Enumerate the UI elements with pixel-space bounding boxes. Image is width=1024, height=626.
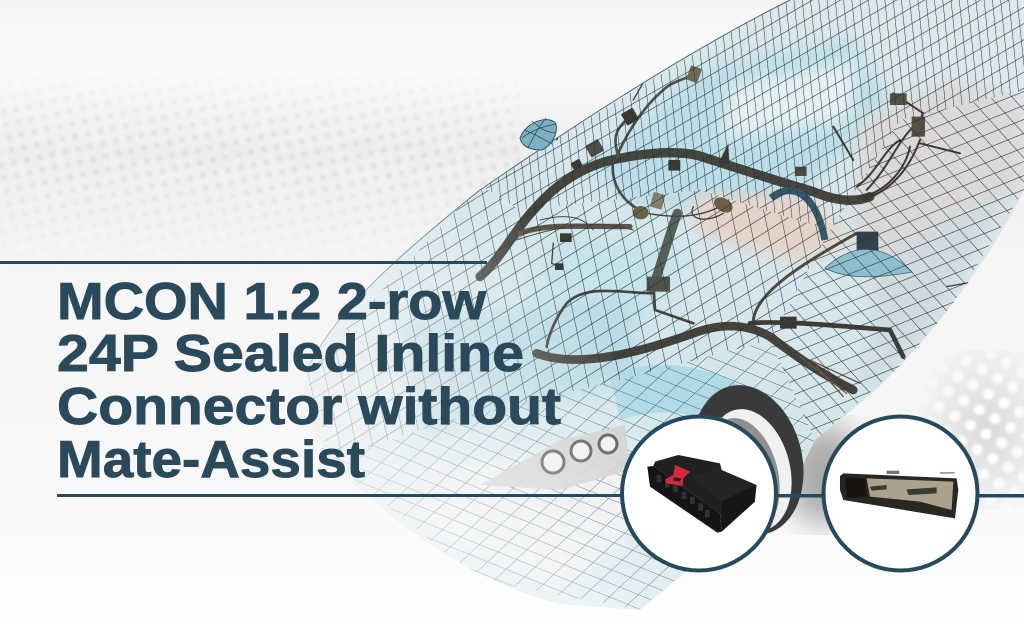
headlights [480, 425, 630, 490]
icon: black connector with red latch [647, 455, 757, 533]
circle: connector rear view [824, 416, 978, 570]
title: MCON 1.2 2-row [57, 273, 487, 331]
circle: connector front view [622, 416, 776, 570]
icon: connector with terminals [840, 471, 958, 518]
top rule [0, 261, 487, 264]
steering wheel [771, 191, 825, 240]
left side mirror [520, 118, 556, 150]
illustration: wireframe car [290, 0, 1024, 626]
title [57, 273, 561, 489]
car body fill and interior [290, 0, 1024, 626]
roofline stroke [306, 0, 790, 372]
mesh: hood [306, 185, 830, 460]
right side mirror [825, 249, 912, 277]
wiring harness [480, 65, 983, 397]
title: 24P Sealed Inline [57, 325, 524, 383]
title: Connector without [57, 378, 561, 436]
mesh: roof and windshield [480, 0, 1024, 230]
front wheel [699, 385, 804, 534]
mesh: door side [770, 90, 1024, 440]
mesh: front bumper and wheel arch [330, 340, 815, 610]
bottom rule [57, 494, 1024, 498]
harness connectors [555, 65, 925, 329]
title: Mate-Assist [57, 431, 365, 489]
